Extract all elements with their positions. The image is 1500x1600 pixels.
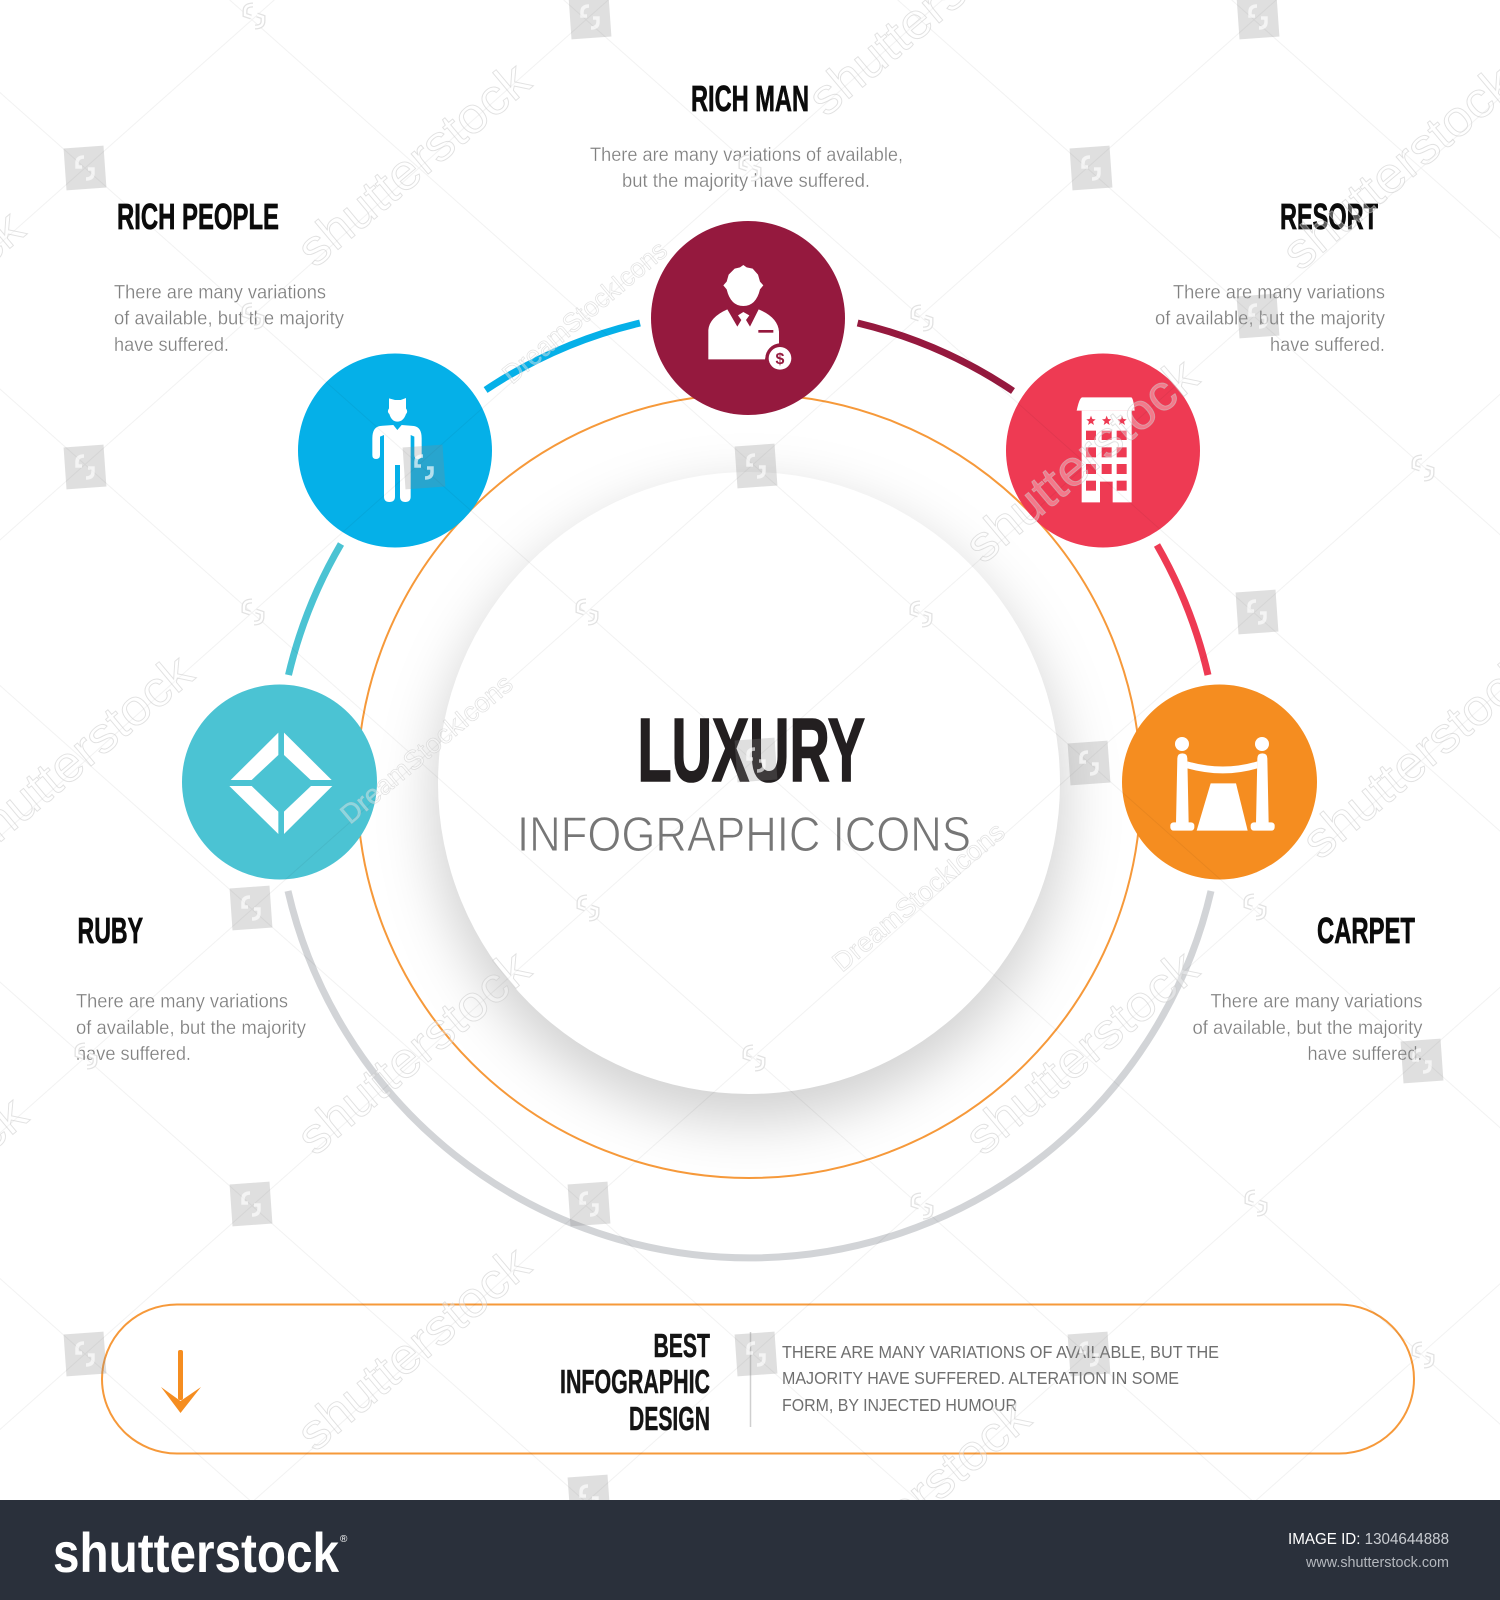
text: banner description: MAJORITY HAVE SUFFERED. ALTERATION IN SOME bbox=[782, 1368, 1179, 1388]
text: ruby description bbox=[76, 992, 306, 1065]
icon: rich people bbox=[298, 354, 492, 548]
divider bbox=[750, 1332, 752, 1427]
watermarks: DreamStockIcons bbox=[827, 816, 1011, 978]
text: ruby description: of available, but the majority bbox=[76, 1018, 306, 1039]
icon: rich man bbox=[651, 221, 845, 415]
title: LUXURY bbox=[638, 701, 865, 801]
watermarks: shutterstock bbox=[286, 939, 541, 1165]
text: carpet description: of available, but the majority bbox=[1192, 1018, 1423, 1039]
heading: best infographic design bbox=[560, 1327, 710, 1437]
panel: footer bar bbox=[0, 1500, 1500, 1600]
text: rich man description: but the majority have suffered. bbox=[622, 171, 870, 192]
watermarks: shutterstock bbox=[286, 1235, 541, 1461]
central disc with shadow bbox=[433, 472, 1065, 1122]
heading: resort: RESORT bbox=[1280, 196, 1378, 237]
text: carpet description: have suffered. bbox=[1308, 1044, 1422, 1065]
heading: best infographic design: DESIGN bbox=[629, 1400, 710, 1437]
orange ring bbox=[357, 394, 1141, 1178]
icon: rich man: $ bbox=[776, 351, 785, 368]
watermarks: DreamStockIcons bbox=[497, 235, 673, 390]
text: banner description: FORM, BY INJECTED HUMOUR bbox=[782, 1395, 1017, 1415]
footer logo: ® bbox=[340, 1534, 348, 1545]
heading: rich man: RICH MAN bbox=[691, 78, 809, 119]
arc: ruby to rich people bbox=[288, 544, 341, 675]
watermarks: DreamStockIcons bbox=[335, 668, 519, 830]
heading: best infographic design: BEST bbox=[654, 1327, 710, 1364]
footer url: www.shutterstock.com bbox=[1305, 1554, 1449, 1571]
text: ruby description: There are many variations bbox=[76, 992, 288, 1012]
text: rich man description: There are many variations of available, bbox=[590, 145, 903, 166]
heading: rich people: RICH PEOPLE bbox=[117, 196, 279, 237]
watermarks: shutterstock bbox=[954, 939, 1209, 1165]
panel: bottom banner bbox=[102, 1304, 1414, 1454]
text: banner description bbox=[782, 1342, 1219, 1415]
text: carpet description bbox=[1192, 992, 1423, 1065]
footer logo: shutterstock bbox=[53, 1521, 340, 1584]
text: rich people description bbox=[114, 282, 344, 356]
icon: ruby bbox=[182, 684, 377, 880]
heading: ruby: RUBY bbox=[78, 910, 143, 951]
text: resort description: have suffered. bbox=[1270, 335, 1385, 356]
text: rich people description: of available, but the majority bbox=[114, 308, 344, 330]
text: rich people description: have suffered. bbox=[114, 335, 229, 356]
text: carpet description: There are many variations bbox=[1210, 992, 1422, 1012]
arc: rich man to resort bbox=[858, 323, 1013, 391]
text: resort description bbox=[1155, 282, 1385, 356]
heading: best infographic design: INFOGRAPHIC bbox=[560, 1363, 710, 1400]
text: resort description: of available, but the majority bbox=[1155, 308, 1385, 330]
watermarks: shutterstock bbox=[286, 51, 541, 277]
icon: resort bbox=[1006, 354, 1200, 548]
subtitle: INFOGRAPHIC ICONS bbox=[517, 808, 971, 862]
icon: down arrow bbox=[161, 1350, 201, 1413]
text: rich man description bbox=[590, 145, 903, 192]
heading: carpet: CARPET bbox=[1317, 910, 1415, 951]
text: banner description: THERE ARE MANY VARIATIONS OF AVAILABLE, BUT THE bbox=[782, 1342, 1219, 1362]
text: rich people description: There are many variations bbox=[114, 282, 326, 304]
text: ruby description: have suffered. bbox=[76, 1044, 191, 1065]
footer image id: IMAGE ID: 1304644888 bbox=[1288, 1531, 1449, 1548]
arc: rich people to rich man bbox=[486, 323, 640, 390]
watermarks: shutterstock bbox=[954, 347, 1209, 573]
icon: carpet bbox=[1122, 684, 1317, 880]
arc: grey lower ring bbox=[288, 891, 1211, 1258]
text: resort description: There are many variations bbox=[1173, 282, 1385, 304]
arc: resort to carpet bbox=[1157, 545, 1208, 675]
